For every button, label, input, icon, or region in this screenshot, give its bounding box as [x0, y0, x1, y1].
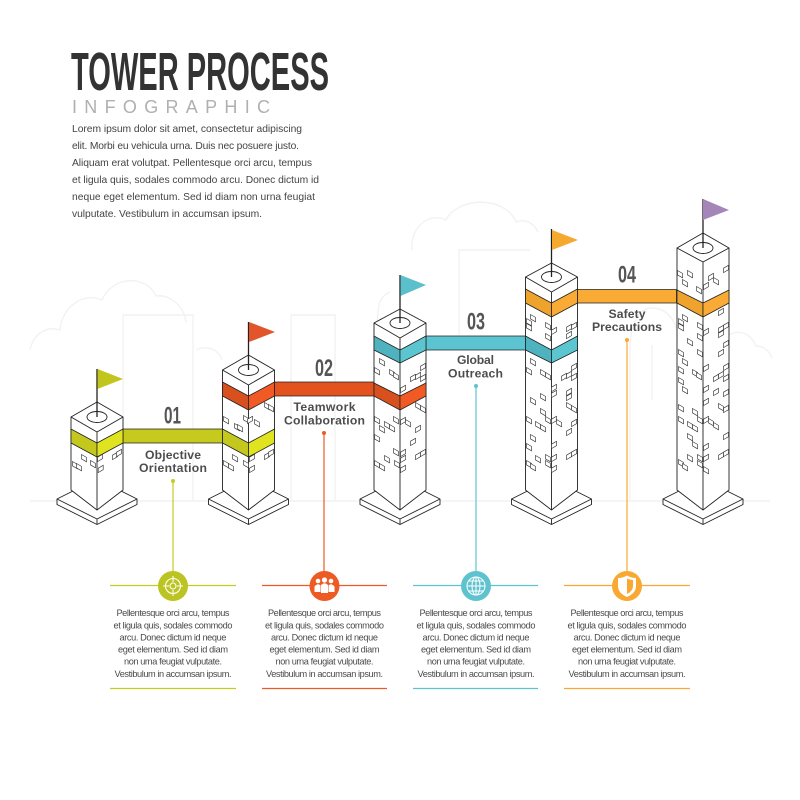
panel text 2: eget elementum. Sed id diam — [270, 644, 380, 654]
intro text block: neque eget elementum. Sed id diam non urna feugiat — [72, 192, 315, 203]
connector band 04 — [578, 290, 676, 303]
step label: Safety Precautions: Precautions — [592, 320, 662, 334]
panel text 1: Pellentesque orci arcu, tempus — [116, 608, 230, 618]
intro text block: Lorem ipsum dolor sit amet, consectetur adipiscing — [72, 124, 302, 135]
panel text 1: Vestibulum in accumsan ipsum. — [114, 669, 232, 679]
intro text block — [72, 124, 319, 220]
panel text 4: et ligula quis, sodales commodo — [568, 620, 686, 630]
panel text 3: non urna feugiat vulputate. — [427, 656, 525, 666]
panel: safety precautions — [564, 338, 690, 688]
panel text 1: arcu. Donec dictum id neque — [120, 632, 226, 642]
tower 4 — [512, 229, 592, 524]
step label: Objective Orientation: Objective — [145, 448, 201, 462]
flag 5 — [703, 199, 729, 248]
panel text 3 — [416, 608, 536, 679]
panel text 2: arcu. Donec dictum id neque — [271, 632, 378, 642]
panel text 4: Pellentesque orci arcu, tempus — [570, 608, 684, 618]
intro text block: et ligula quis, sodales commodo arcu. Donec dictum id — [72, 175, 319, 186]
subtitle: INFOGRAPHIC — [72, 97, 270, 117]
tower 1 — [57, 369, 137, 524]
step number 03: 03 — [467, 308, 485, 336]
flag 3 — [400, 275, 426, 323]
panel text 4: Vestibulum in accumsan ipsum. — [568, 669, 686, 679]
panel text 2: et ligula quis, sodales commodo — [265, 620, 384, 630]
tower 2 — [208, 322, 288, 524]
step number 01: 01 — [164, 402, 181, 430]
step label: Safety Precautions — [592, 307, 662, 334]
leader line 4 — [625, 338, 629, 572]
step number 02: 02 — [315, 355, 333, 382]
icon: target — [158, 571, 188, 601]
panel text 1: eget elementum. Sed id diam — [118, 644, 228, 654]
panel text 4: arcu. Donec dictum id neque — [574, 632, 680, 642]
panel text 4: eget elementum. Sed id diam — [572, 644, 682, 654]
tower 3 — [360, 275, 440, 524]
step label: Global Outreach — [448, 353, 503, 380]
icon: shield — [612, 571, 642, 601]
background city outline — [30, 202, 772, 501]
panel text 2 — [265, 608, 384, 679]
panel text 3: arcu. Donec dictum id neque — [422, 632, 530, 642]
panel text 4: non urna feugiat vulputate. — [578, 656, 676, 666]
connector band 02 — [274, 382, 374, 396]
icon: globe — [461, 571, 491, 601]
title: TOWER PROCESS — [71, 42, 329, 102]
step label: Objective Orientation — [139, 448, 207, 475]
leader line 1 — [171, 479, 175, 572]
panel text 3: Pellentesque orci arcu, tempus — [420, 608, 533, 618]
connector band 03 — [426, 336, 526, 350]
panel text 2: non urna feugiat vulputate. — [276, 656, 374, 666]
step label: Teamwork Collaboration: Collaboration — [284, 414, 365, 428]
panel: global outreach — [413, 384, 538, 688]
step label: Teamwork Collaboration — [284, 400, 365, 428]
panel text 2: Pellentesque orci arcu, tempus — [268, 608, 381, 618]
panel text 3: eget elementum. Sed id diam — [421, 644, 531, 654]
panel text 1: et ligula quis, sodales commodo — [114, 620, 232, 630]
intro text block: elit. Morbi eu vehicula urna. Duis nec posuere justo. — [72, 141, 299, 152]
panel: teamwork collaboration — [262, 431, 387, 688]
panel text 1 — [114, 608, 232, 679]
panel text 3: et ligula quis, sodales commodo — [416, 620, 536, 630]
tower 5 — [663, 199, 743, 524]
panel text 3: Vestibulum in accumsan ipsum. — [418, 669, 534, 679]
connector band 01 — [123, 429, 222, 443]
flag 1 — [97, 369, 123, 417]
panel text 1: non urna feugiat vulputate. — [124, 656, 222, 666]
panel text 2: Vestibulum in accumsan ipsum. — [266, 669, 383, 679]
panel: objective orientation — [110, 479, 236, 688]
step label: Safety Precautions: Safety — [608, 307, 646, 321]
icon: people — [310, 571, 340, 601]
step number 04: 04 — [618, 262, 636, 288]
intro text block: vulputate. Vestibulum in accumsan ipsum. — [72, 209, 262, 220]
leader line 2 — [322, 431, 326, 572]
flag 2 — [248, 322, 275, 370]
step label: Objective Orientation: Orientation — [139, 461, 207, 475]
step label: Teamwork Collaboration: Teamwork — [294, 400, 356, 414]
step label: Global Outreach: Outreach — [448, 366, 503, 380]
leader line 3 — [474, 384, 478, 572]
intro text block: Aliquam erat volutpat. Pellentesque orci arcu, tempus — [72, 158, 312, 169]
step label: Global Outreach: Global — [457, 353, 494, 367]
panel text 4 — [568, 608, 686, 679]
flag 4 — [552, 229, 578, 277]
